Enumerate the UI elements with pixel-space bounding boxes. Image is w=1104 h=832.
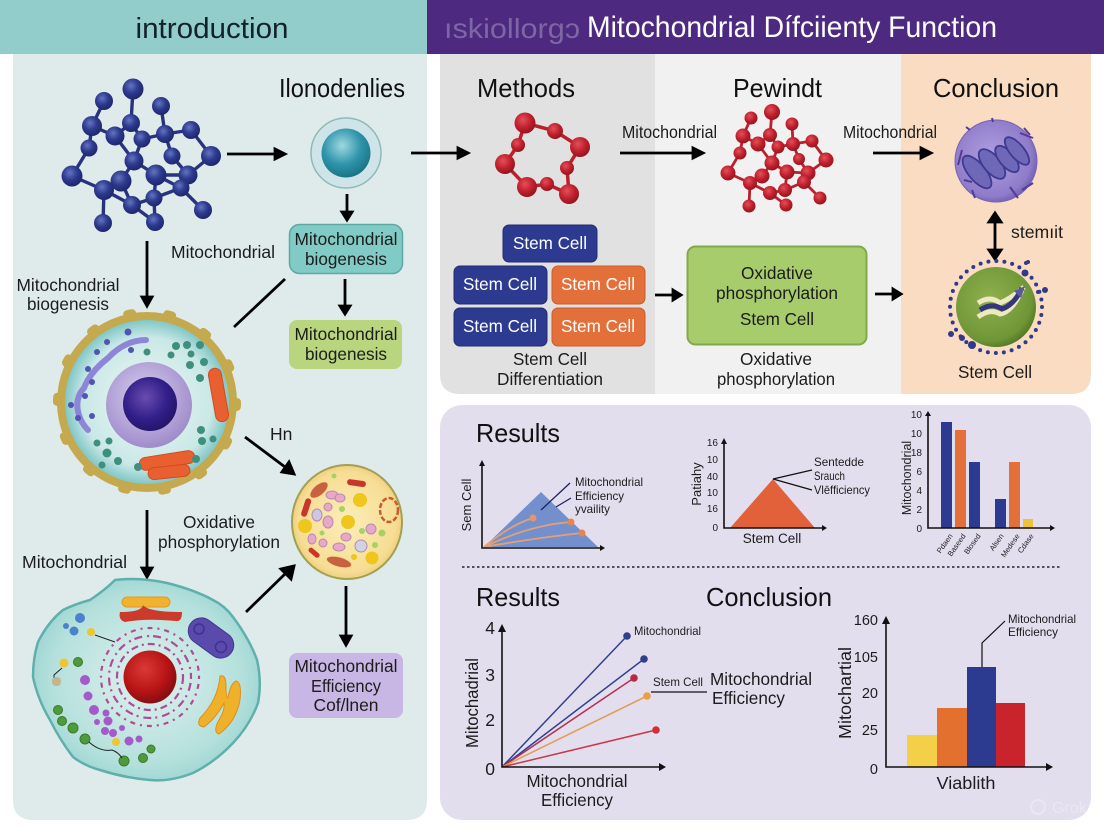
header: introduction [0, 0, 427, 54]
header: title [427, 0, 1104, 54]
chart: viability bar chart: 160 [854, 613, 878, 629]
arrow: oxidative box to conclusion [875, 289, 901, 299]
heading: Conclusion: Conclusion [933, 73, 1059, 103]
chart: triangle area with lines [459, 460, 643, 551]
watermark [1031, 800, 1088, 817]
box: mitochondrial efficiency [289, 653, 403, 718]
chart: bar chart top right: Baseed [946, 532, 968, 558]
label: mitochondrial biogenesis: biogenesis [27, 294, 109, 314]
nucleus [124, 650, 176, 704]
chart: triangle area with lines: yvaility [575, 502, 610, 516]
box: stem cell blue 2 [454, 308, 547, 346]
label: oxidative phosphorylation: phosphorylation [158, 532, 280, 552]
purple vesicles [80, 675, 142, 746]
box: stem cell orange 2: Stem Cell [561, 316, 635, 336]
chart: triangle area with lines: Efficiency [575, 489, 624, 503]
label: mitochondrial biogenesis [16, 275, 120, 314]
chart: line chart [462, 618, 812, 810]
label: oxidative phosphorylation: Oxidative [740, 349, 812, 369]
heading: conclusion lower: Conclusion [706, 582, 832, 612]
chart: triangle area with lines: Sem Cell [459, 479, 474, 531]
chart: line chart: 3 [485, 665, 495, 685]
label: oxidative phosphorylation: Oxidative [183, 512, 255, 532]
arrow: double headed [989, 213, 1001, 259]
chart: viability bar chart: Viablith [936, 773, 996, 793]
heading: Ilonodenlies: Ilonodenlies [279, 73, 405, 103]
label: oxidative phosphorylation [717, 349, 835, 389]
yellow mitochondrion [199, 676, 240, 734]
chart: line chart: Stem Cell [653, 675, 703, 689]
divider [462, 566, 1060, 568]
box: mitochondrial biogenesis green: biogenesis [305, 344, 387, 364]
box: stem cell blue 1 [454, 266, 547, 304]
box: stem cell orange 1: Stem Cell [561, 274, 635, 294]
chart: bar chart top right: Medese [999, 532, 1022, 559]
box: mitochondrial biogenesis green: Mitochondrial [294, 324, 398, 344]
chart: red triangle: 16 [707, 504, 718, 515]
icon: teal stem cell [311, 118, 381, 188]
box: stem cell top: Stem Cell [513, 233, 587, 253]
chart: bar chart top right: Alsen [988, 532, 1006, 553]
panel: introduction background [13, 54, 427, 820]
green vesicles [54, 658, 155, 766]
mitochondria [138, 367, 230, 480]
chart: line chart: 4 [485, 618, 495, 638]
box: oxidative phosphorylation: Stem Cell [740, 309, 814, 329]
blue vesicles [63, 613, 85, 636]
chart: line chart: Mitochadrial [462, 658, 482, 748]
box: mitochondrial efficiency: Mitochondrial [294, 656, 398, 676]
chart: viability bar chart: Mitochartial [835, 647, 855, 739]
chart: bar chart top right: 0 [916, 524, 922, 535]
chart: bar chart top right: Pdaen [935, 532, 955, 555]
chart: red triangle: Srauch [814, 469, 845, 483]
chart: red triangle: Vlēfficiency [814, 483, 870, 497]
chart: bar chart top right: 18 [911, 448, 922, 459]
chart: red triangle: 16 [707, 438, 718, 449]
icon: yellow organelle cell [292, 465, 402, 579]
chart: viability bar chart [835, 612, 1076, 793]
icon: red branched molecule [720, 104, 834, 212]
label: stem cell differentiation: Differentiation [497, 369, 603, 389]
chart: red triangle: Sentedde [814, 455, 864, 469]
arrow: methods to results [620, 148, 703, 158]
box: mitochondrial efficiency: Cof/lnen [314, 695, 378, 715]
chart: red triangle: 10 [707, 488, 718, 499]
arrow: cell to yellow organelle cell [245, 437, 294, 474]
label: stem cell: Stem Cell [958, 362, 1032, 382]
arrow: molecule down to cell [142, 241, 152, 306]
chart: red triangle: 0 [712, 523, 718, 534]
box: stem cell blue 2: Stem Cell [463, 316, 537, 336]
icon: purple mitochondria cell [955, 118, 1037, 202]
arrow: stem cells to oxidative box [655, 290, 681, 300]
chart: red triangle: 40 [707, 472, 718, 483]
label: mitochondrial: Mitochondrial [622, 122, 717, 142]
ribosomes [94, 341, 216, 471]
arrow: molecule to stem cell [227, 149, 285, 159]
nucleus [106, 362, 192, 448]
chart: line chart: Efficiency [541, 790, 613, 810]
arrow: results to conclusion [873, 148, 931, 158]
chart: viability bar chart: 25 [862, 723, 878, 739]
chart: bar chart top right: 10 [911, 429, 922, 440]
rough ER rings [101, 628, 199, 726]
header: title: Mitochondrial Dífciienty Function [587, 11, 997, 44]
chart: triangle area with lines: Mitochondrial [575, 475, 643, 489]
chart: bar chart top right: 2 [916, 505, 922, 516]
chart: bar chart top right: Blosed [962, 532, 983, 556]
box: oxidative phosphorylation [688, 246, 866, 344]
heading: Methods: Methods [477, 73, 575, 103]
label: Hn: Hn [270, 424, 292, 444]
box: stem cell orange 2 [552, 308, 645, 346]
yellow vesicles [60, 628, 120, 746]
chart: line chart: 0 [485, 759, 495, 779]
arrow: stem cell to methods [411, 148, 468, 158]
chart: bar chart top right: 4 [916, 486, 922, 497]
icon: green stem cell [948, 260, 1048, 353]
chart: viability bar chart: 20 [862, 686, 878, 702]
watermark: Grok [1052, 800, 1088, 817]
chart: red triangle: 10 [707, 455, 718, 466]
box: stem cell orange 1 [552, 266, 645, 304]
box: oxidative phosphorylation: Oxidative [741, 263, 813, 283]
label: mitochondrial biogenesis: Mitochondrial [16, 275, 120, 295]
panel: results column [655, 54, 901, 394]
purple organelle [183, 613, 239, 663]
header: introduction: introduction [136, 13, 288, 45]
label: mitochondrial: Mitochondrial [22, 552, 127, 572]
panel: conclusion column [901, 54, 1091, 394]
connector: teal box to cell [234, 279, 285, 327]
box: stem cell top [503, 225, 597, 262]
chart: line chart: Mitochondrial [634, 624, 701, 638]
box: stem cell blue 1: Stem Cell [463, 274, 537, 294]
heading: Pewindt: Pewindt [733, 73, 823, 103]
icon: blue molecule [62, 78, 221, 232]
chart: bar chart top right: 6 [916, 467, 922, 478]
label: stemit: stemıit [1011, 222, 1063, 242]
heading: results lower: Results [476, 582, 560, 612]
chart: bar chart top right: 10 [911, 410, 922, 421]
label: stem cell differentiation [497, 349, 603, 389]
arrow: cell down to lower cell [142, 510, 152, 577]
chart: viability bar chart: 0 [870, 762, 878, 778]
chart: red triangle: Patiahy [689, 462, 704, 506]
chart: bar chart top right: Cdase [1016, 532, 1036, 555]
box: mitochondrial biogenesis green [289, 320, 402, 369]
endoplasmic reticulum [68, 328, 146, 430]
chart: bar chart top right [900, 410, 1055, 559]
label: oxidative phosphorylation [158, 512, 280, 552]
chart: viability bar chart: 105 [854, 650, 878, 666]
arrow: lower cell to yellow cell [246, 566, 294, 612]
label: mitochondrial: Mitochondrial [843, 122, 937, 142]
chart: line chart: Mitochondrial [526, 771, 628, 791]
chart: line chart: 2 [485, 710, 495, 730]
panel: methods column [440, 54, 655, 394]
icon: organelle cell [33, 579, 260, 780]
chart: viability bar chart: Efficiency [1008, 625, 1058, 639]
header: title: ıskiollorgɔ [444, 13, 580, 44]
icon: animal cell with nucleus [57, 312, 237, 492]
label: stem cell differentiation: Stem Cell [513, 349, 587, 369]
chart: red triangle: Stem Cell [743, 531, 801, 546]
icon: red ring molecule [495, 112, 590, 204]
panel: results charts background [440, 405, 1091, 820]
arrow: stem cell down [342, 194, 352, 220]
chart: bar chart top right: Mitochondrial [900, 441, 914, 515]
box: oxidative phosphorylation: phosphorylation [716, 283, 838, 303]
chart: line chart: Efficiency [712, 688, 785, 708]
chart: red triangle [689, 438, 870, 546]
arrow: yellow cell to efficiency box [341, 586, 351, 645]
arrow: teal box to green box [340, 279, 350, 314]
label: oxidative phosphorylation: phosphorylation [717, 369, 835, 389]
box: mitochondrial biogenesis teal: biogenesis [305, 249, 387, 269]
box: mitochondrial biogenesis teal: Mitochondrial [294, 229, 398, 249]
chart: viability bar chart: Mitochondrial [1008, 612, 1076, 626]
box: mitochondrial biogenesis teal [290, 224, 402, 274]
label: mitochondrial: Mitochondrial [171, 242, 275, 262]
golgi [120, 597, 182, 622]
box: mitochondrial efficiency: Efficiency [311, 676, 381, 696]
heading: results: Results [476, 418, 560, 448]
chart: line chart: Mitochondrial [710, 669, 812, 689]
